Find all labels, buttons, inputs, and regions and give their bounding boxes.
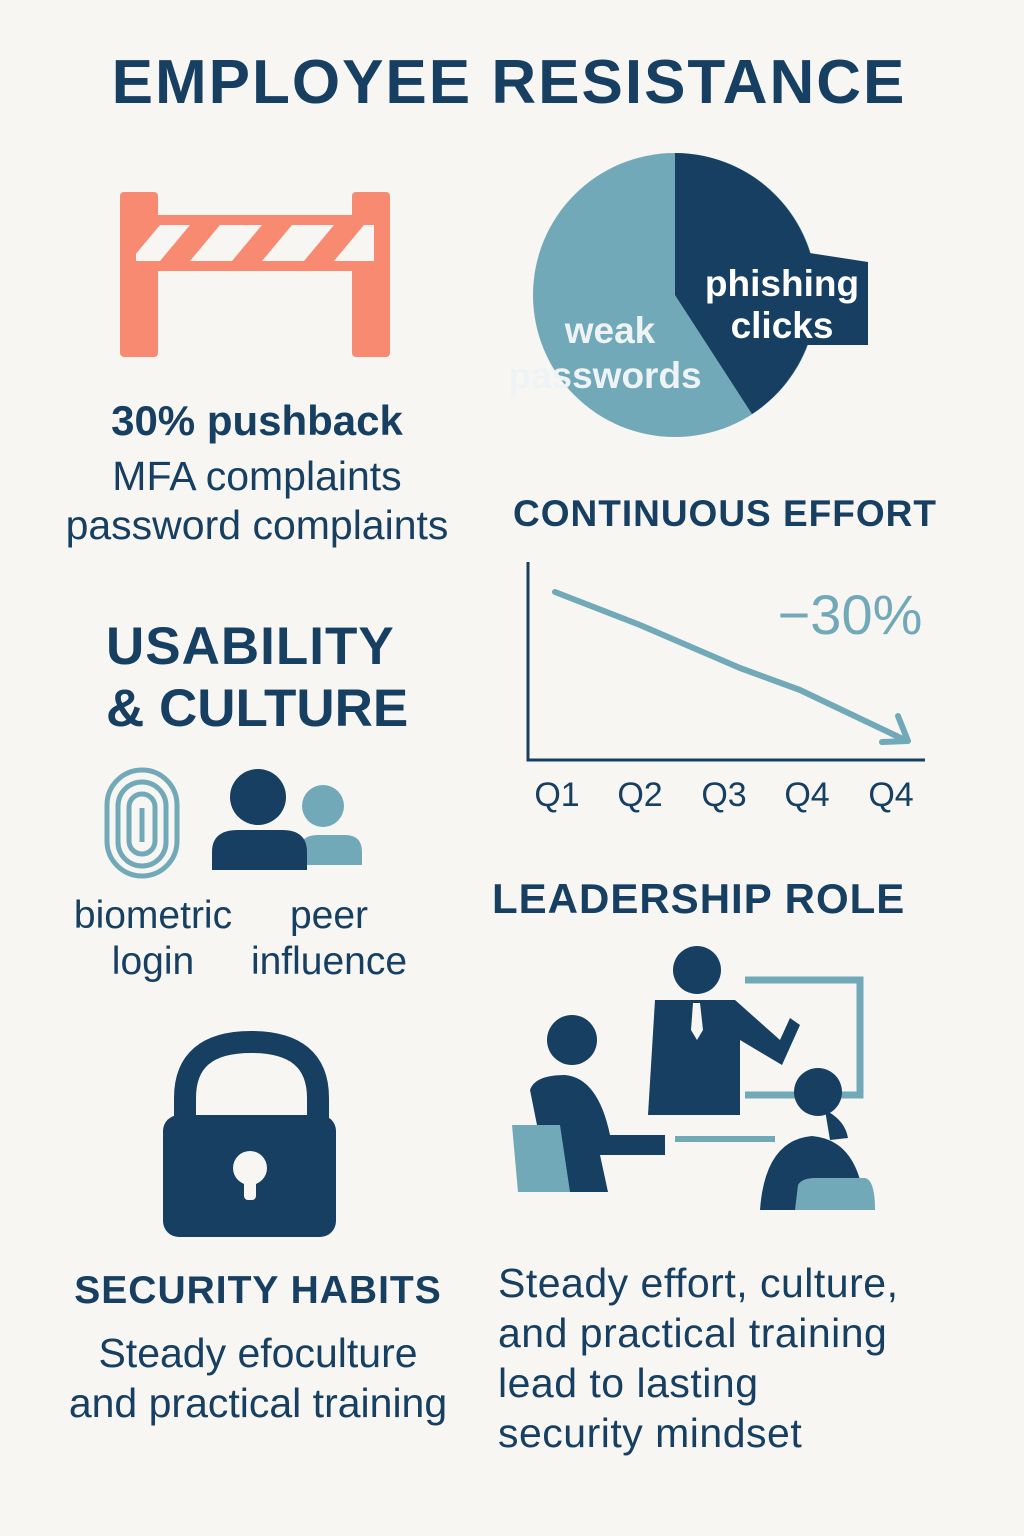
line chart: Q1	[534, 776, 580, 814]
text: peer influence: influence	[251, 940, 407, 983]
icon: barrier	[120, 192, 390, 357]
text: pushback: MFA complaints	[112, 453, 402, 499]
text: peer influence: peer	[290, 894, 368, 937]
line chart: Q3	[701, 776, 747, 814]
pie chart: passwords	[508, 355, 702, 396]
text: biometric login	[74, 894, 232, 983]
text: pushback: password complaints	[66, 502, 448, 548]
title: EMPLOYEE RESISTANCE	[112, 48, 906, 117]
heading: continuous effort: CONTINUOUS EFFORT	[513, 493, 937, 534]
text: peer influence	[251, 894, 407, 983]
pie chart: weak	[564, 310, 656, 351]
line chart: −30%	[778, 583, 922, 646]
text: pushback	[66, 397, 448, 548]
text: security habits: and practical training	[69, 1380, 447, 1426]
text: conclusion: Steady effort, culture,	[498, 1260, 898, 1306]
line chart: Q4	[868, 776, 914, 814]
text: biometric login: login	[112, 940, 194, 983]
pie chart: phishing	[705, 263, 859, 304]
heading: security habits: SECURITY HABITS	[74, 1269, 442, 1312]
text: conclusion: security mindset	[498, 1410, 802, 1456]
heading: usability & culture	[106, 617, 408, 738]
line chart: Q4	[784, 776, 830, 814]
heading: usability & culture: USABILITY	[106, 617, 395, 676]
pie chart: clicks	[731, 305, 833, 346]
heading: usability & culture: & CULTURE	[106, 679, 408, 738]
line chart: Q2	[617, 776, 663, 814]
text: biometric login: biometric	[74, 894, 232, 937]
heading: leadership role: LEADERSHIP ROLE	[492, 875, 905, 922]
text: pushback: 30% pushback	[111, 397, 403, 444]
text: security habits: Steady efoculture	[98, 1330, 418, 1376]
text: conclusion: lead to lasting	[498, 1360, 759, 1406]
text: conclusion	[498, 1260, 898, 1456]
text: security habits	[69, 1330, 447, 1426]
text: conclusion: and practical training	[498, 1310, 887, 1356]
